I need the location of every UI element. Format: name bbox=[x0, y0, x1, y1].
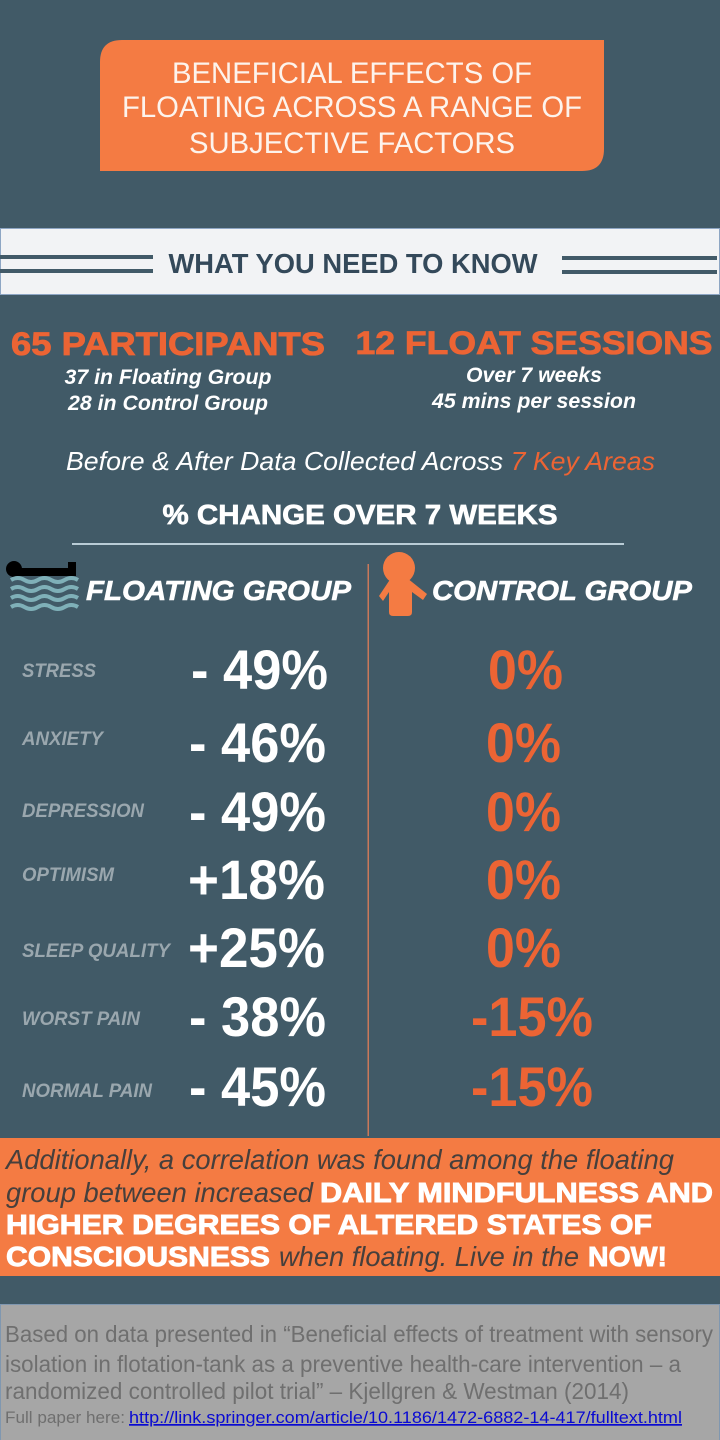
control group values: 0% bbox=[486, 780, 561, 843]
floating group values: +18% bbox=[188, 848, 325, 911]
floating group values: - 45% bbox=[189, 1055, 326, 1118]
control group values: 0% bbox=[486, 848, 561, 911]
row labels: SLEEP QUALITY bbox=[22, 941, 172, 962]
row labels bbox=[21, 661, 172, 1102]
stat: float sessions: 12 FLOAT SESSIONS bbox=[356, 325, 712, 361]
stat: float sessions: 45 mins per session bbox=[431, 390, 636, 413]
heading: control group: CONTROL GROUP bbox=[432, 575, 692, 606]
stat: float sessions bbox=[356, 325, 712, 413]
title banner: BENEFICIAL EFFECTS OF bbox=[172, 57, 532, 90]
source note: http://link.springer.com/article/10.1186/1472-6882-14-417/fulltext.html bbox=[129, 1408, 682, 1427]
icon: floating person on water bbox=[6, 561, 78, 609]
callout: mindfulness: Additionally, a correlation was found among the floating bbox=[4, 1144, 675, 1175]
stat: participants bbox=[11, 326, 325, 415]
control group values: 0% bbox=[486, 916, 561, 979]
control group values bbox=[471, 638, 593, 1118]
callout: mindfulness: when floating. Live in the bbox=[279, 1241, 579, 1272]
source note bbox=[0, 1304, 720, 1440]
row labels: NORMAL PAIN bbox=[22, 1081, 153, 1102]
title banner bbox=[100, 40, 604, 171]
section heading: what you need to know: WHAT YOU NEED TO KNOW bbox=[168, 248, 538, 279]
floating group values: - 46% bbox=[189, 711, 326, 774]
callout: mindfulness: HIGHER DEGREES OF ALTERED STATES OF bbox=[6, 1209, 652, 1240]
floating group values: - 38% bbox=[189, 985, 326, 1048]
source note: Based on data presented in “Beneficial effects of treatment with sensory bbox=[5, 1321, 713, 1347]
source note: isolation in flotation-tank as a preventive health-care intervention – a bbox=[5, 1351, 681, 1377]
floating group values bbox=[188, 638, 328, 1118]
source note: randomized controlled pilot trial” – Kjellgren & Westman (2014) bbox=[5, 1378, 629, 1404]
control group values: 0% bbox=[488, 638, 563, 701]
floating group values: - 49% bbox=[189, 780, 326, 843]
source note: Full paper here: bbox=[5, 1408, 125, 1427]
stat: float sessions: Over 7 weeks bbox=[466, 364, 602, 387]
floating group values: - 49% bbox=[191, 638, 328, 701]
callout: mindfulness: DAILY MINDFULNESS AND bbox=[320, 1177, 713, 1208]
control group values: -15% bbox=[471, 985, 593, 1048]
column divider bbox=[368, 564, 369, 1136]
heading: floating group: FLOATING GROUP bbox=[86, 575, 351, 606]
row labels: STRESS bbox=[22, 661, 96, 682]
callout: mindfulness: NOW! bbox=[588, 1241, 667, 1272]
title banner: SUBJECTIVE FACTORS bbox=[189, 127, 515, 160]
callout: mindfulness bbox=[0, 1138, 720, 1276]
row labels: ANXIETY bbox=[21, 729, 105, 750]
callout: mindfulness: CONSCIOUSNESS bbox=[6, 1241, 270, 1272]
stat: participants: 28 in Control Group bbox=[67, 392, 268, 415]
floating group values: +25% bbox=[188, 916, 325, 979]
icon: person bbox=[379, 552, 427, 616]
row labels: WORST PAIN bbox=[22, 1009, 141, 1030]
control group values: 0% bbox=[486, 711, 561, 774]
stat: participants: 65 PARTICIPANTS bbox=[11, 326, 325, 362]
heading: percent change: % CHANGE OVER 7 WEEKS bbox=[162, 499, 558, 530]
section heading: what you need to know bbox=[0, 228, 720, 294]
control group values: -15% bbox=[471, 1055, 593, 1118]
title banner: FLOATING ACROSS A RANGE OF bbox=[122, 91, 582, 124]
subheading: data collected: Before & After Data Collected Across 7 Key Areas bbox=[66, 446, 655, 476]
row labels: OPTIMISM bbox=[22, 865, 115, 886]
callout: mindfulness: group between increased bbox=[6, 1177, 315, 1208]
stat: participants: 37 in Floating Group bbox=[64, 366, 272, 389]
row labels: DEPRESSION bbox=[22, 801, 145, 822]
